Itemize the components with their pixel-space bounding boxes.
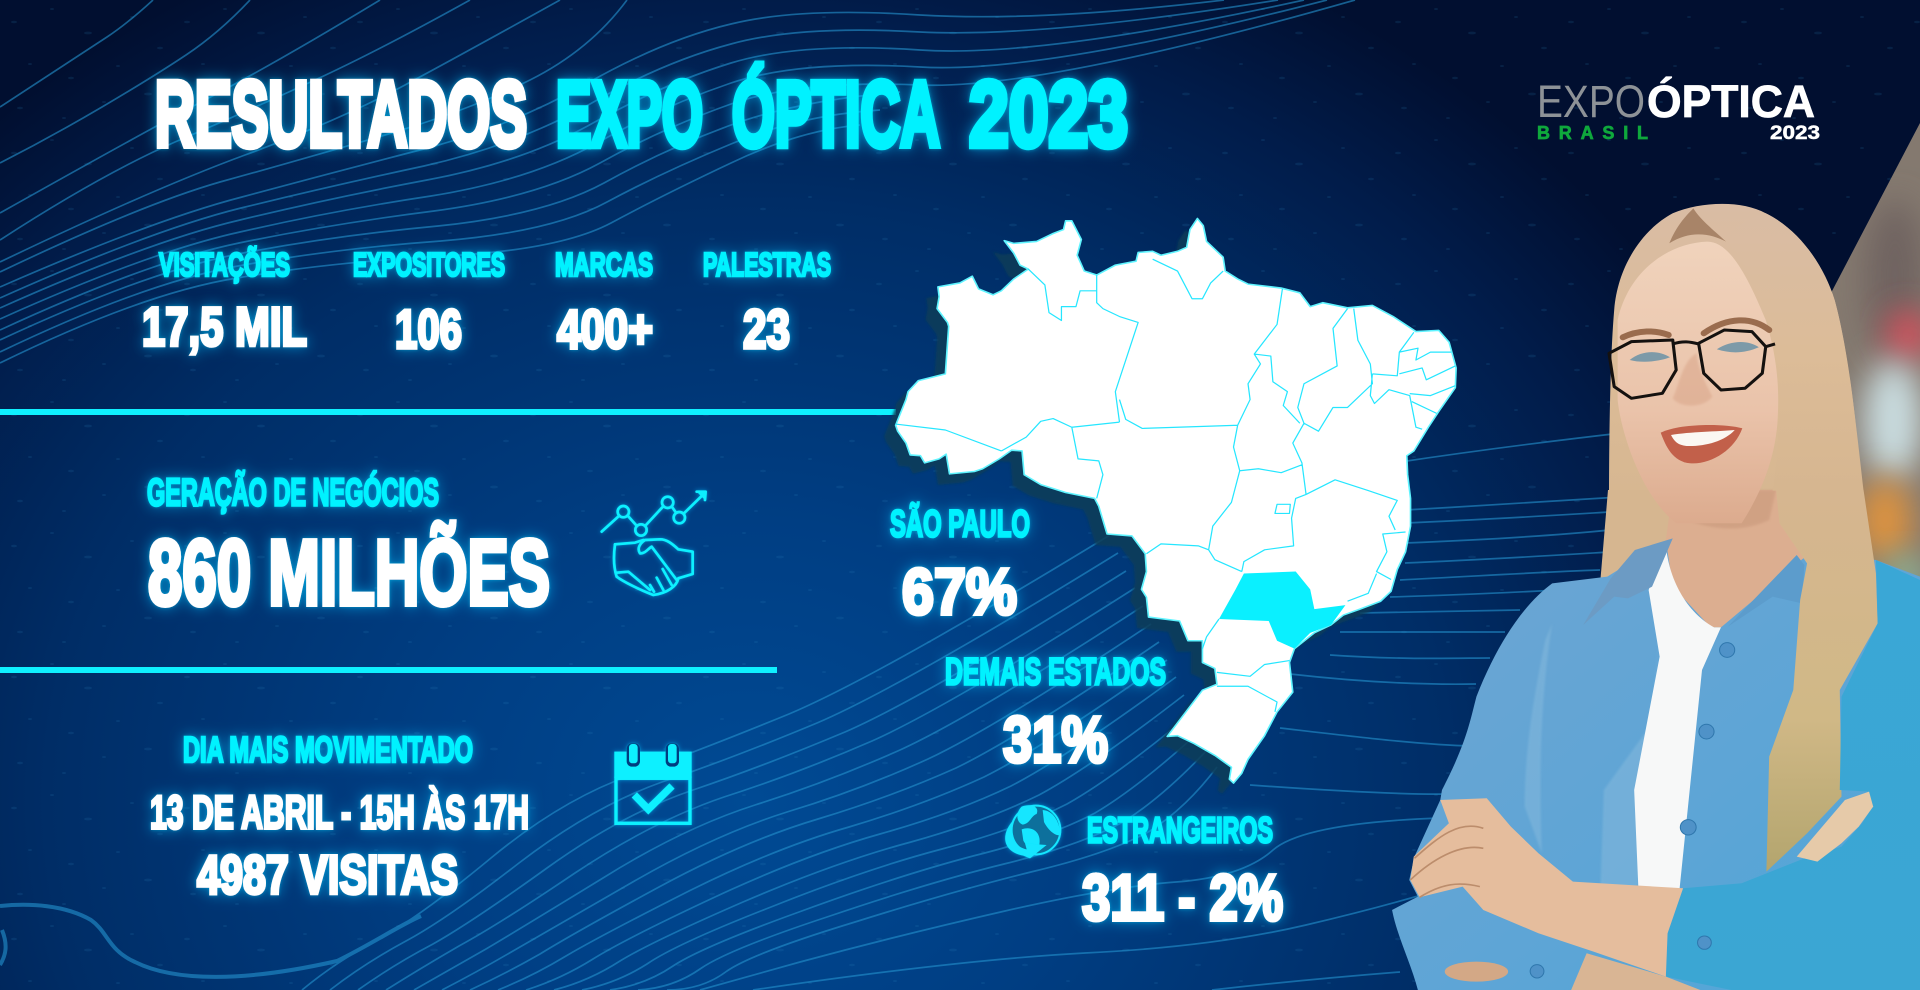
state borders (896, 259, 1455, 712)
map of Brazil (884, 218, 1456, 794)
text: visits: 4987 VISITAS (197, 844, 458, 906)
stat: expositores: EXPOSITORES (353, 246, 505, 283)
stat: marcas (555, 246, 653, 360)
neck (1666, 490, 1805, 627)
map shadow (884, 230, 1445, 794)
title: ÓPTICA: ÓPTICA (732, 62, 940, 166)
stat: expositores: 106 (395, 298, 462, 360)
stat: visitações: VISITAÇÕES (159, 246, 290, 283)
title: RESULTADOS: RESULTADOS (155, 62, 527, 166)
stat: demais estados: 31% (1003, 703, 1108, 776)
blurred photo background, top right (1832, 123, 1920, 577)
glasses (1609, 330, 1775, 398)
face (1609, 213, 1864, 523)
stat: palestras: 23 (743, 298, 790, 360)
stat: expositores (353, 246, 505, 360)
forearm and hand (1410, 798, 1683, 977)
stat: demais estados (945, 652, 1166, 776)
panel: geração de negócios (147, 470, 550, 624)
teeth (1671, 430, 1735, 446)
person: woman with glasses (1392, 204, 1920, 990)
logo: Expo Óptica Brasil 2023: 2023 (1770, 123, 1820, 144)
mouth (1661, 425, 1742, 463)
icon: handshake and growth chart (602, 492, 706, 595)
logo: Expo Óptica Brasil 2023: BRASIL (1537, 123, 1648, 143)
logo: Expo Óptica Brasil 2023: ÓPTICA (1647, 76, 1815, 127)
icon: calendar (614, 743, 692, 823)
collar right (1728, 555, 1804, 627)
figure: 860 milhões: 860 MILHÕES (148, 520, 550, 624)
eyebrows (1623, 320, 1769, 337)
stat: marcas: MARCAS (555, 246, 653, 283)
stat: estrangeiros: ESTRANGEIROS (1087, 810, 1273, 850)
logo: Expo Óptica Brasil 2023: EXPO (1537, 76, 1645, 127)
hair left front (1600, 490, 1676, 580)
divider middle (0, 667, 777, 673)
stat: palestras (703, 246, 831, 360)
stat: estrangeiros: 311 - 2% (1082, 861, 1283, 934)
stat: palestras: PALESTRAS (703, 246, 831, 283)
title: EXPO: EXPO (556, 62, 703, 166)
title (155, 62, 1128, 166)
text: date and time: 13 DE ABRIL - 15H ÀS 17H (150, 786, 529, 838)
hair strand over temple (1724, 213, 1864, 491)
stat: São Paulo (890, 502, 1030, 628)
icon: globe (1005, 805, 1061, 858)
eyes (1630, 342, 1759, 362)
title: 2023: 2023 (969, 62, 1128, 166)
buttons (1530, 643, 1735, 978)
hair back (1609, 204, 1862, 510)
stat: visitações (142, 246, 307, 358)
arm lower (1571, 953, 1700, 990)
São Paulo state highlight (1219, 572, 1345, 649)
stat: estrangeiros (1082, 810, 1283, 934)
neck shadow (1676, 490, 1776, 528)
stat: demais estados: DEMAIS ESTADOS (945, 652, 1166, 694)
cuff opening (1445, 962, 1508, 982)
stat: marcas: 400+ (557, 298, 653, 360)
shirt shading (1525, 623, 1659, 887)
collar left (1583, 538, 1673, 625)
body (1392, 490, 1920, 990)
t-shirt (1634, 543, 1721, 888)
right sleeve (1666, 560, 1920, 990)
map body (896, 218, 1456, 783)
stat: visitações: 17,5 MIL (142, 296, 307, 358)
divider top (0, 409, 896, 415)
heading: dia mais movimentado: DIA MAIS MOVIMENTADO (183, 729, 473, 770)
finger lines (1410, 826, 1483, 897)
stat: São Paulo: SÃO PAULO (890, 502, 1030, 546)
panel: dia mais movimentado (150, 729, 529, 906)
shirt (1392, 538, 1920, 990)
logo: Expo Óptica Brasil 2023 (1537, 76, 1820, 144)
heading: geração de negócios: GERAÇÃO DE NEGÓCIOS (147, 470, 439, 514)
nose shadow (1673, 353, 1712, 406)
right hand fingers (1797, 792, 1873, 862)
hair lock (1766, 490, 1878, 872)
stat: São Paulo: 67% (902, 555, 1017, 628)
